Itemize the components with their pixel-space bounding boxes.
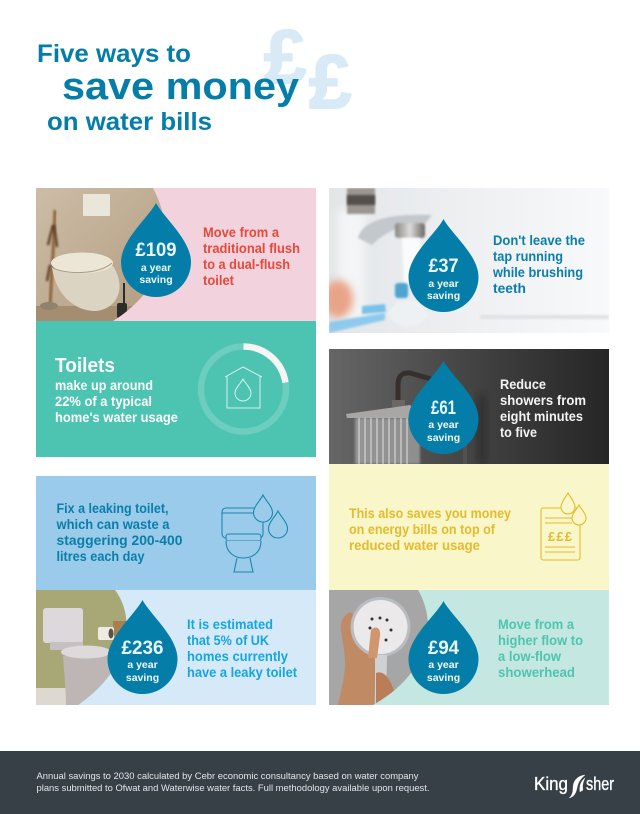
- decorative pound signs: £: [264, 15, 306, 100]
- panel: toilets statistic: [36, 321, 316, 457]
- text: move to a low-flow showerhead: higher flow to: [498, 632, 583, 648]
- drop: £61 a year saving: a year: [428, 419, 459, 431]
- decorative pound signs: [264, 15, 351, 125]
- drop: £236 a year saving: £236: [122, 637, 164, 659]
- text: toilets water usage: [55, 355, 178, 425]
- drop: £61 a year saving: [408, 361, 478, 454]
- drop: £94 a year saving: a year: [428, 659, 459, 671]
- text: don't leave the tap running: tap running: [493, 248, 563, 264]
- drop: £109 a year saving: [121, 203, 191, 297]
- drop: £109 a year saving: a year: [141, 262, 171, 274]
- drop: £109 a year saving: £109: [136, 239, 177, 261]
- panel: tap running: [323, 188, 609, 333]
- footnote text: [36, 771, 430, 794]
- title text: [37, 40, 299, 136]
- text: fix a leaking toilet: litres each day: [56, 548, 145, 564]
- panel: dual-flush toilet: [36, 188, 316, 321]
- text: 5% of UK homes: that 5% of UK: [187, 632, 269, 648]
- title text: save money: [62, 66, 299, 108]
- text: fix a leaking toilet: [56, 500, 183, 564]
- icon: house with water drop: [225, 367, 262, 408]
- text: toilets water usage: Toilets: [55, 355, 115, 377]
- logo: Kingfisher: sher: [586, 774, 614, 794]
- text: move to a low-flow showerhead: Move from a: [498, 616, 574, 632]
- footer: [0, 751, 640, 814]
- text: fix a leaking toilet: staggering 200-400: [56, 532, 183, 548]
- text: move from a traditional flush: to a dual-flush: [203, 256, 290, 272]
- text: fix a leaking toilet: which can waste a: [56, 516, 170, 532]
- text: reduce showers: eight minutes: [500, 408, 583, 424]
- text: saves money on energy bills: This also saves you money: [349, 505, 511, 521]
- text: move to a low-flow showerhead: a low-flow: [498, 648, 561, 664]
- text: reduce showers: Reduce: [500, 376, 546, 392]
- text: toilets water usage: 22% of a typical: [55, 393, 152, 409]
- text: move to a low-flow showerhead: [498, 616, 583, 680]
- logo: Kingfisher: King: [534, 774, 568, 794]
- photo: rain shower head: [329, 349, 609, 464]
- text: 5% of UK homes: have a leaky toilet: [187, 664, 297, 680]
- drop: £37 a year saving: £37: [428, 255, 458, 277]
- footnote text: plans submitted to Ofwat and Waterwise water facts. Full methodology available upon request.: [36, 783, 430, 794]
- text: don't leave the tap running: teeth: [493, 280, 526, 296]
- text: move from a traditional flush: Move from a: [203, 224, 279, 240]
- text: reduce showers: to five: [500, 424, 537, 440]
- panel: fix a leaking toilet: [36, 476, 316, 590]
- drop: £61 a year saving: saving: [427, 432, 460, 444]
- text: toilets water usage: make up around: [55, 377, 153, 393]
- chart: 22% progress ring: [201, 346, 286, 432]
- drop: £109 a year saving: saving: [139, 274, 173, 286]
- drop: £236 a year saving: [108, 600, 178, 694]
- drop: £236 a year saving: saving: [126, 672, 159, 684]
- text: don't leave the tap running: Don't leave the: [493, 232, 585, 248]
- drop: £61 a year saving: £61: [431, 397, 456, 419]
- panel: reduce showers: [329, 349, 609, 464]
- text: move from a traditional flush: [203, 224, 300, 288]
- title text: Five ways to: [37, 40, 191, 68]
- drop: £37 a year saving: a year: [428, 278, 459, 290]
- panel: energy bills: [329, 464, 609, 590]
- icon: bill with drops: £££: [548, 529, 573, 544]
- drop: £94 a year saving: £94: [428, 637, 459, 659]
- drop: £94 a year saving: saving: [427, 672, 460, 684]
- text: don't leave the tap running: [492, 232, 585, 296]
- drop: £37 a year saving: [408, 219, 478, 312]
- text: 5% of UK homes: [187, 616, 297, 680]
- text: toilets water usage: home's water usage: [55, 409, 178, 425]
- logo: Kingfisher: [534, 774, 614, 798]
- text: 5% of UK homes: homes currently: [187, 648, 288, 664]
- text: move to a low-flow showerhead: showerhead: [498, 664, 575, 680]
- text: move from a traditional flush: traditional flush: [203, 240, 300, 256]
- drop: £236 a year saving: a year: [127, 659, 158, 671]
- text: saves money on energy bills: [349, 505, 511, 553]
- text: saves money on energy bills: reduced water usage: [349, 537, 480, 553]
- icon: bill with drops: [541, 493, 586, 560]
- photo: hand holding showerhead: [329, 590, 439, 705]
- photo: close-coupled toilet: [36, 590, 126, 705]
- text: saves money on energy bills: on energy bills on top of: [349, 521, 495, 537]
- title text: on water bills: [47, 108, 212, 136]
- photo: running tap and toothbrush: [323, 188, 609, 333]
- panel: leaky toilet estimate: [36, 590, 316, 705]
- drop: £94 a year saving: [408, 601, 478, 694]
- footnote text: Annual savings to 2030 calculated by Cebr economic consultancy based on water company: [36, 771, 419, 782]
- text: move from a traditional flush: toilet: [203, 272, 234, 288]
- text: 5% of UK homes: It is estimated: [187, 616, 273, 632]
- panel: low-flow showerhead: [329, 590, 609, 705]
- decorative pound signs: £: [309, 40, 351, 125]
- drop: £37 a year saving: saving: [427, 290, 460, 302]
- text: fix a leaking toilet: Fix a leaking toilet,: [56, 500, 168, 516]
- photo: wall-hung toilet: [36, 188, 176, 321]
- text: don't leave the tap running: while brushing: [492, 264, 583, 280]
- icon: toilet with drops: [222, 495, 288, 572]
- text: reduce showers: showers from: [500, 392, 586, 408]
- text: reduce showers: [500, 376, 586, 440]
- title block: [37, 15, 351, 136]
